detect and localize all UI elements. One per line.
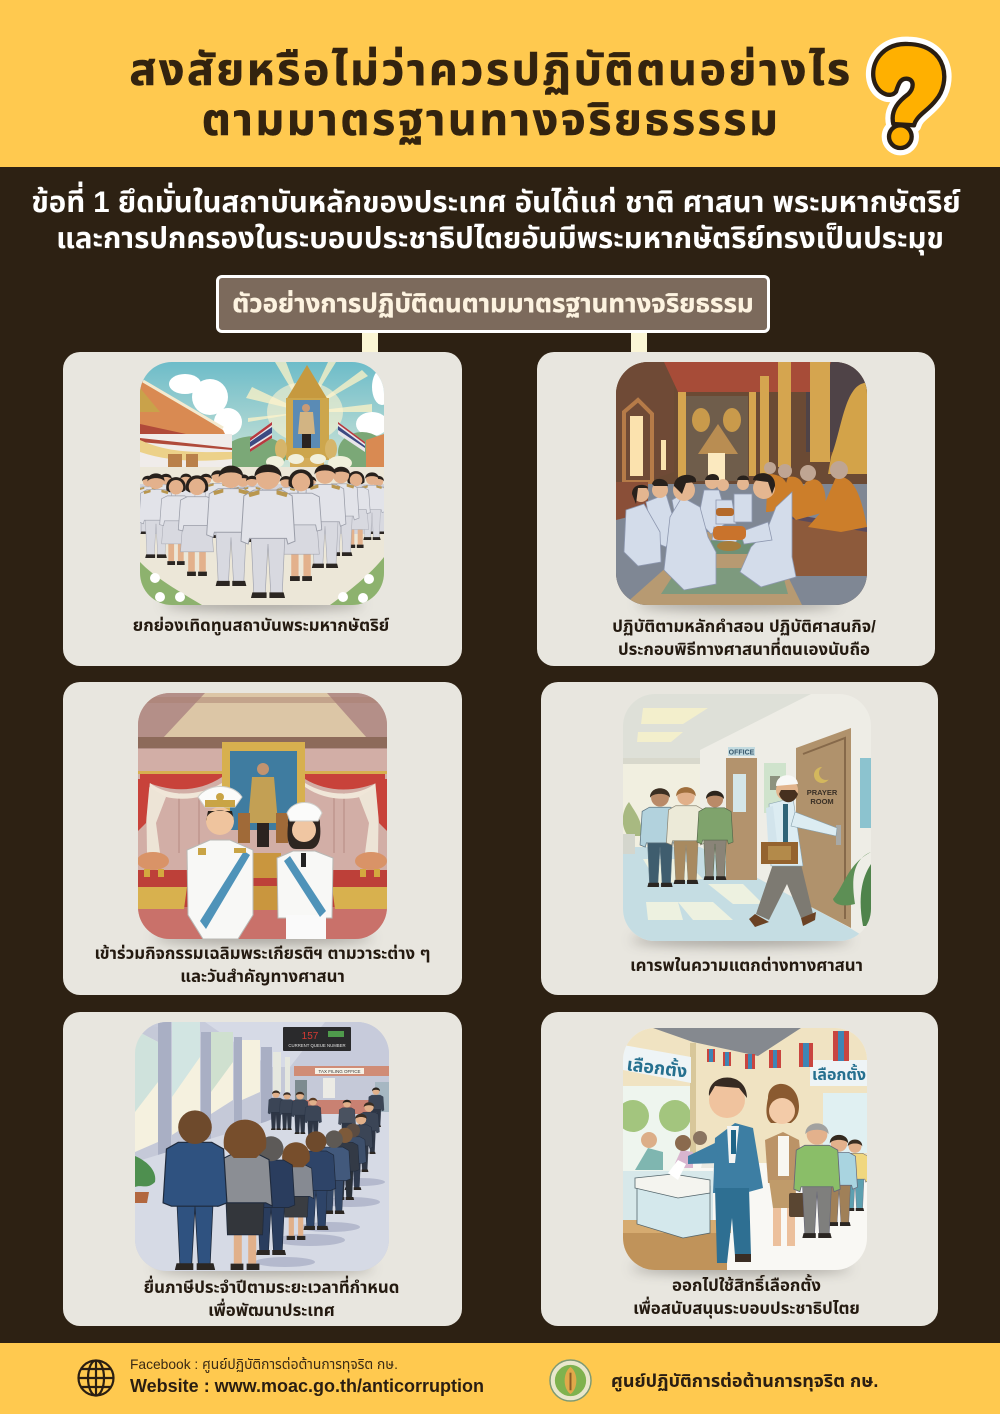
panel: religious practice <box>537 352 935 666</box>
caption: เคารพในความแตกต่างทางศาสนา <box>630 956 863 975</box>
royal portrait <box>222 742 305 847</box>
queue number display <box>283 1027 351 1051</box>
prayer room door <box>796 728 851 928</box>
panel: respect religious difference <box>541 682 938 995</box>
election banners: เลือกตั้ง <box>626 1052 689 1082</box>
logo: ministry seal <box>549 1359 592 1402</box>
alms offering <box>713 526 746 540</box>
queue number display: CURRENT QUEUE NUMBER <box>288 1043 346 1048</box>
plant <box>135 1156 155 1203</box>
website text: Website : www.moac.go.th/anticorruption <box>130 1376 484 1396</box>
colleagues walking <box>640 787 733 887</box>
caption <box>612 617 876 659</box>
bunting flags <box>707 1031 849 1069</box>
illustration: office corridor with prayer room <box>623 694 871 941</box>
image shadow <box>153 932 373 944</box>
panel: honour the monarchy <box>63 352 462 666</box>
section heading box: ตัวอย่างการปฏิบัติตนตามมาตรฐานทางจริยธรรม <box>232 288 754 318</box>
illustration: officials before royal portrait <box>140 362 384 605</box>
prayer room door: ROOM <box>810 797 834 806</box>
plants <box>623 802 871 926</box>
image shadow <box>631 1262 851 1274</box>
footer band <box>0 1343 1000 1414</box>
organisation name: ศูนย์ปฏิบัติการต่อต้านการทุจริต กษ. <box>611 1371 878 1391</box>
icon: question mark <box>866 36 952 156</box>
caption: ยกย่องเทิดทูนสถาบันพระมหากษัตริย์ <box>133 616 389 635</box>
caption: ประกอบพิธีทางศาสนาที่ตนเองนับถือ <box>618 640 870 659</box>
image shadow <box>153 1262 373 1274</box>
prayer room door: PRAYER <box>807 788 838 797</box>
kneeling officials <box>624 490 796 590</box>
panel: exercise voting right <box>541 1012 938 1326</box>
caption: ปฏิบัติตามหลักคำสอน ปฏิบัติศาสนกิจ/ <box>612 617 876 636</box>
wood table and ballot box <box>623 1160 731 1270</box>
panel: pay annual tax <box>63 1012 462 1326</box>
image shadow <box>637 598 837 610</box>
windows <box>135 1022 290 1152</box>
illustration: queue at tax filing office <box>135 1022 389 1271</box>
curtains <box>138 771 387 853</box>
connector left <box>362 330 378 354</box>
title: ตามมาตรฐานทางจริยธรรรม <box>202 95 780 145</box>
section heading box <box>216 275 770 333</box>
icon: globe <box>77 1359 115 1397</box>
subtitle: standard no. 1 <box>31 182 961 256</box>
female official <box>277 802 333 939</box>
office door <box>726 747 757 880</box>
seated voters <box>623 1131 715 1233</box>
caption: เข้าร่วมกิจกรรมเฉลิมพระเกียรติฯ ตามวาระต่าง ๆ <box>94 944 430 963</box>
woman with briefcase <box>765 1084 811 1246</box>
tax office sign: TAX FILING OFFICE <box>319 1069 360 1074</box>
election banners <box>623 1045 867 1086</box>
connector right <box>631 330 647 354</box>
illustration: officials before royal portrait in hall <box>138 693 387 939</box>
caption: และวันสำคัญทางศาสนา <box>180 967 345 986</box>
caption <box>633 1274 860 1318</box>
flowers <box>140 557 384 605</box>
illustration: merit-making ceremony in temple <box>616 362 867 605</box>
title: สงสัยหรือไม่ว่าควรปฏิบัติตนอย่างไร <box>129 45 853 95</box>
office door: OFFICE <box>729 750 755 756</box>
tax office sign <box>294 1066 389 1076</box>
header band <box>0 0 1000 167</box>
man with prayer rug <box>749 775 837 927</box>
crowd back row <box>140 484 384 534</box>
title <box>129 45 853 145</box>
male official <box>187 786 253 939</box>
subtitle: standard no. 1: ข้อที่ 1 ยึดมั่นในสถาบันหลักของประเทศ อันได้แก่ ชาติ ศาสนา พระมหากษัตริย์ <box>31 186 961 219</box>
queue number display: 157 <box>302 1031 319 1042</box>
facebook text: Facebook : ศูนย์ปฏิบัติการต่อต้านการทุจริต กษ. <box>130 1357 398 1372</box>
subtitle: standard no. 1: และการปกครองในระบอบประชาธิปไตยอันมีพระมหากษัตริย์ทรงเป็นประมุข <box>56 222 944 255</box>
windows with trees <box>617 1043 867 1171</box>
queue of people <box>163 1088 384 1270</box>
caption: เพื่อพัฒนาประเทศ <box>208 1301 335 1320</box>
panel: royal celebration activities <box>63 682 462 995</box>
election banners: เลือกตั้ง <box>812 1064 866 1084</box>
caption: ยื่นภาษีประจำปีตามระยะเวลาที่กำหนด <box>144 1278 399 1297</box>
royal portrait shrine <box>286 365 329 472</box>
caption: ออกไปใช้สิทธิ์เลือกตั้ง <box>672 1276 821 1295</box>
man voting <box>688 1078 763 1263</box>
illustration: voters at polling station <box>623 1028 867 1270</box>
caption <box>144 1276 399 1320</box>
voters waiting in line <box>794 1123 869 1238</box>
image shadow <box>631 934 851 946</box>
caption <box>94 944 430 986</box>
thai flags <box>250 422 365 452</box>
monks on platform <box>764 461 867 576</box>
flowers and drapes <box>137 852 387 910</box>
image shadow <box>163 598 363 610</box>
caption: เพื่อสนับสนุนระบอบประชาธิปไตย <box>633 1299 860 1318</box>
